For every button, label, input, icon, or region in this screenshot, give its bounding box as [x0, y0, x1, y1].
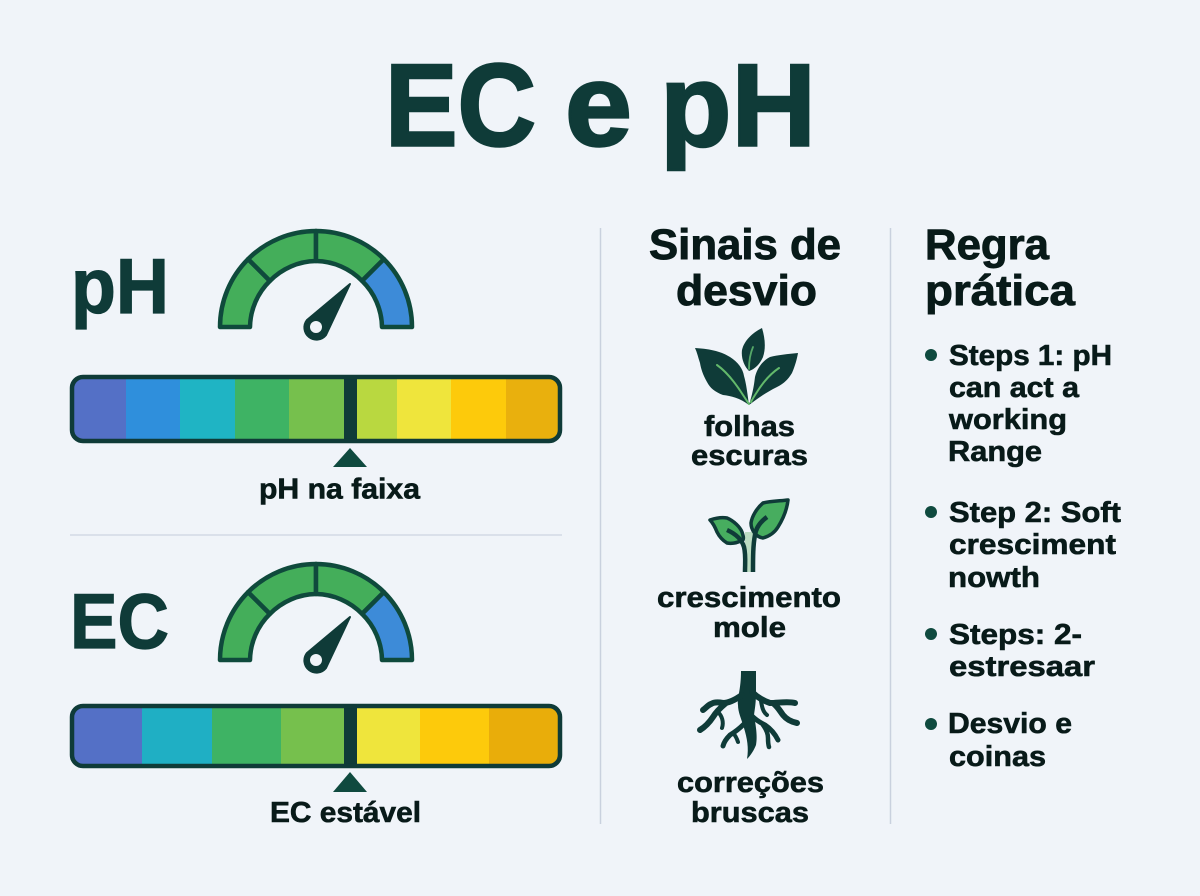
- list item 4: [925, 708, 1072, 773]
- label: crescimento mole: [657, 582, 841, 644]
- label: correções bruscas: [677, 767, 824, 829]
- list item 1: Steps 1: pH: [949, 340, 1112, 372]
- chart: pH scale bar: [72, 377, 560, 441]
- list item 1: [925, 340, 1112, 468]
- label: folhas escuras: folhas: [704, 411, 795, 443]
- heading: Sinais de desvio: [649, 221, 841, 315]
- heading: Regra prática: [925, 221, 1076, 315]
- panel: pH: [71, 231, 560, 506]
- panel: Regra prática: [925, 221, 1121, 773]
- list item 4: coinas: [949, 741, 1046, 773]
- list item 4: Desvio e: [948, 708, 1072, 740]
- list item 3: Steps: 2-: [949, 619, 1082, 651]
- label: correções bruscas: bruscas: [691, 797, 809, 829]
- label: correções bruscas: correções: [677, 767, 824, 799]
- chart: EC scale bar: [72, 706, 560, 766]
- list item 2: cresciment: [949, 529, 1116, 561]
- list item 1: Range: [948, 436, 1042, 468]
- heading: Regra prática: Regra: [925, 221, 1050, 269]
- label: pH na faixa: pH na faixa: [259, 474, 421, 506]
- list item 2: [925, 497, 1121, 594]
- title: EC: [385, 40, 536, 170]
- icon: roots: [700, 671, 797, 759]
- title: [385, 40, 816, 170]
- heading: Sinais de desvio: desvio: [676, 267, 817, 315]
- list item 2: Step 2: Soft: [949, 497, 1121, 529]
- arrow: EC marker: [333, 772, 367, 792]
- heading: pH: pH: [71, 242, 169, 330]
- label: folhas escuras: escuras: [691, 440, 808, 472]
- label: folhas escuras: [691, 411, 808, 472]
- panel: Sinais de desvio: [649, 221, 841, 829]
- icon: pH gauge: [220, 231, 412, 340]
- icon: dark leaves: [695, 328, 798, 405]
- label: crescimento mole: crescimento: [657, 582, 841, 614]
- heading: Sinais de desvio: Sinais de: [649, 221, 841, 269]
- heading: Regra prática: prática: [925, 267, 1076, 315]
- label: crescimento mole: mole: [713, 612, 786, 644]
- list item 3: [925, 619, 1095, 683]
- list item 1: working: [948, 404, 1067, 436]
- icon: seedling: [710, 500, 788, 572]
- panel: EC: [70, 564, 560, 829]
- icon: EC gauge: [220, 564, 412, 673]
- arrow: pH marker: [333, 448, 367, 467]
- title: e: [565, 40, 632, 170]
- heading: EC: EC: [70, 577, 169, 665]
- list item 3: estresaar: [949, 651, 1095, 683]
- title: pH: [660, 40, 816, 170]
- list item 2: nowth: [948, 562, 1040, 594]
- list item 1: can act a: [949, 372, 1080, 404]
- label: EC estável: EC estável: [270, 797, 421, 829]
